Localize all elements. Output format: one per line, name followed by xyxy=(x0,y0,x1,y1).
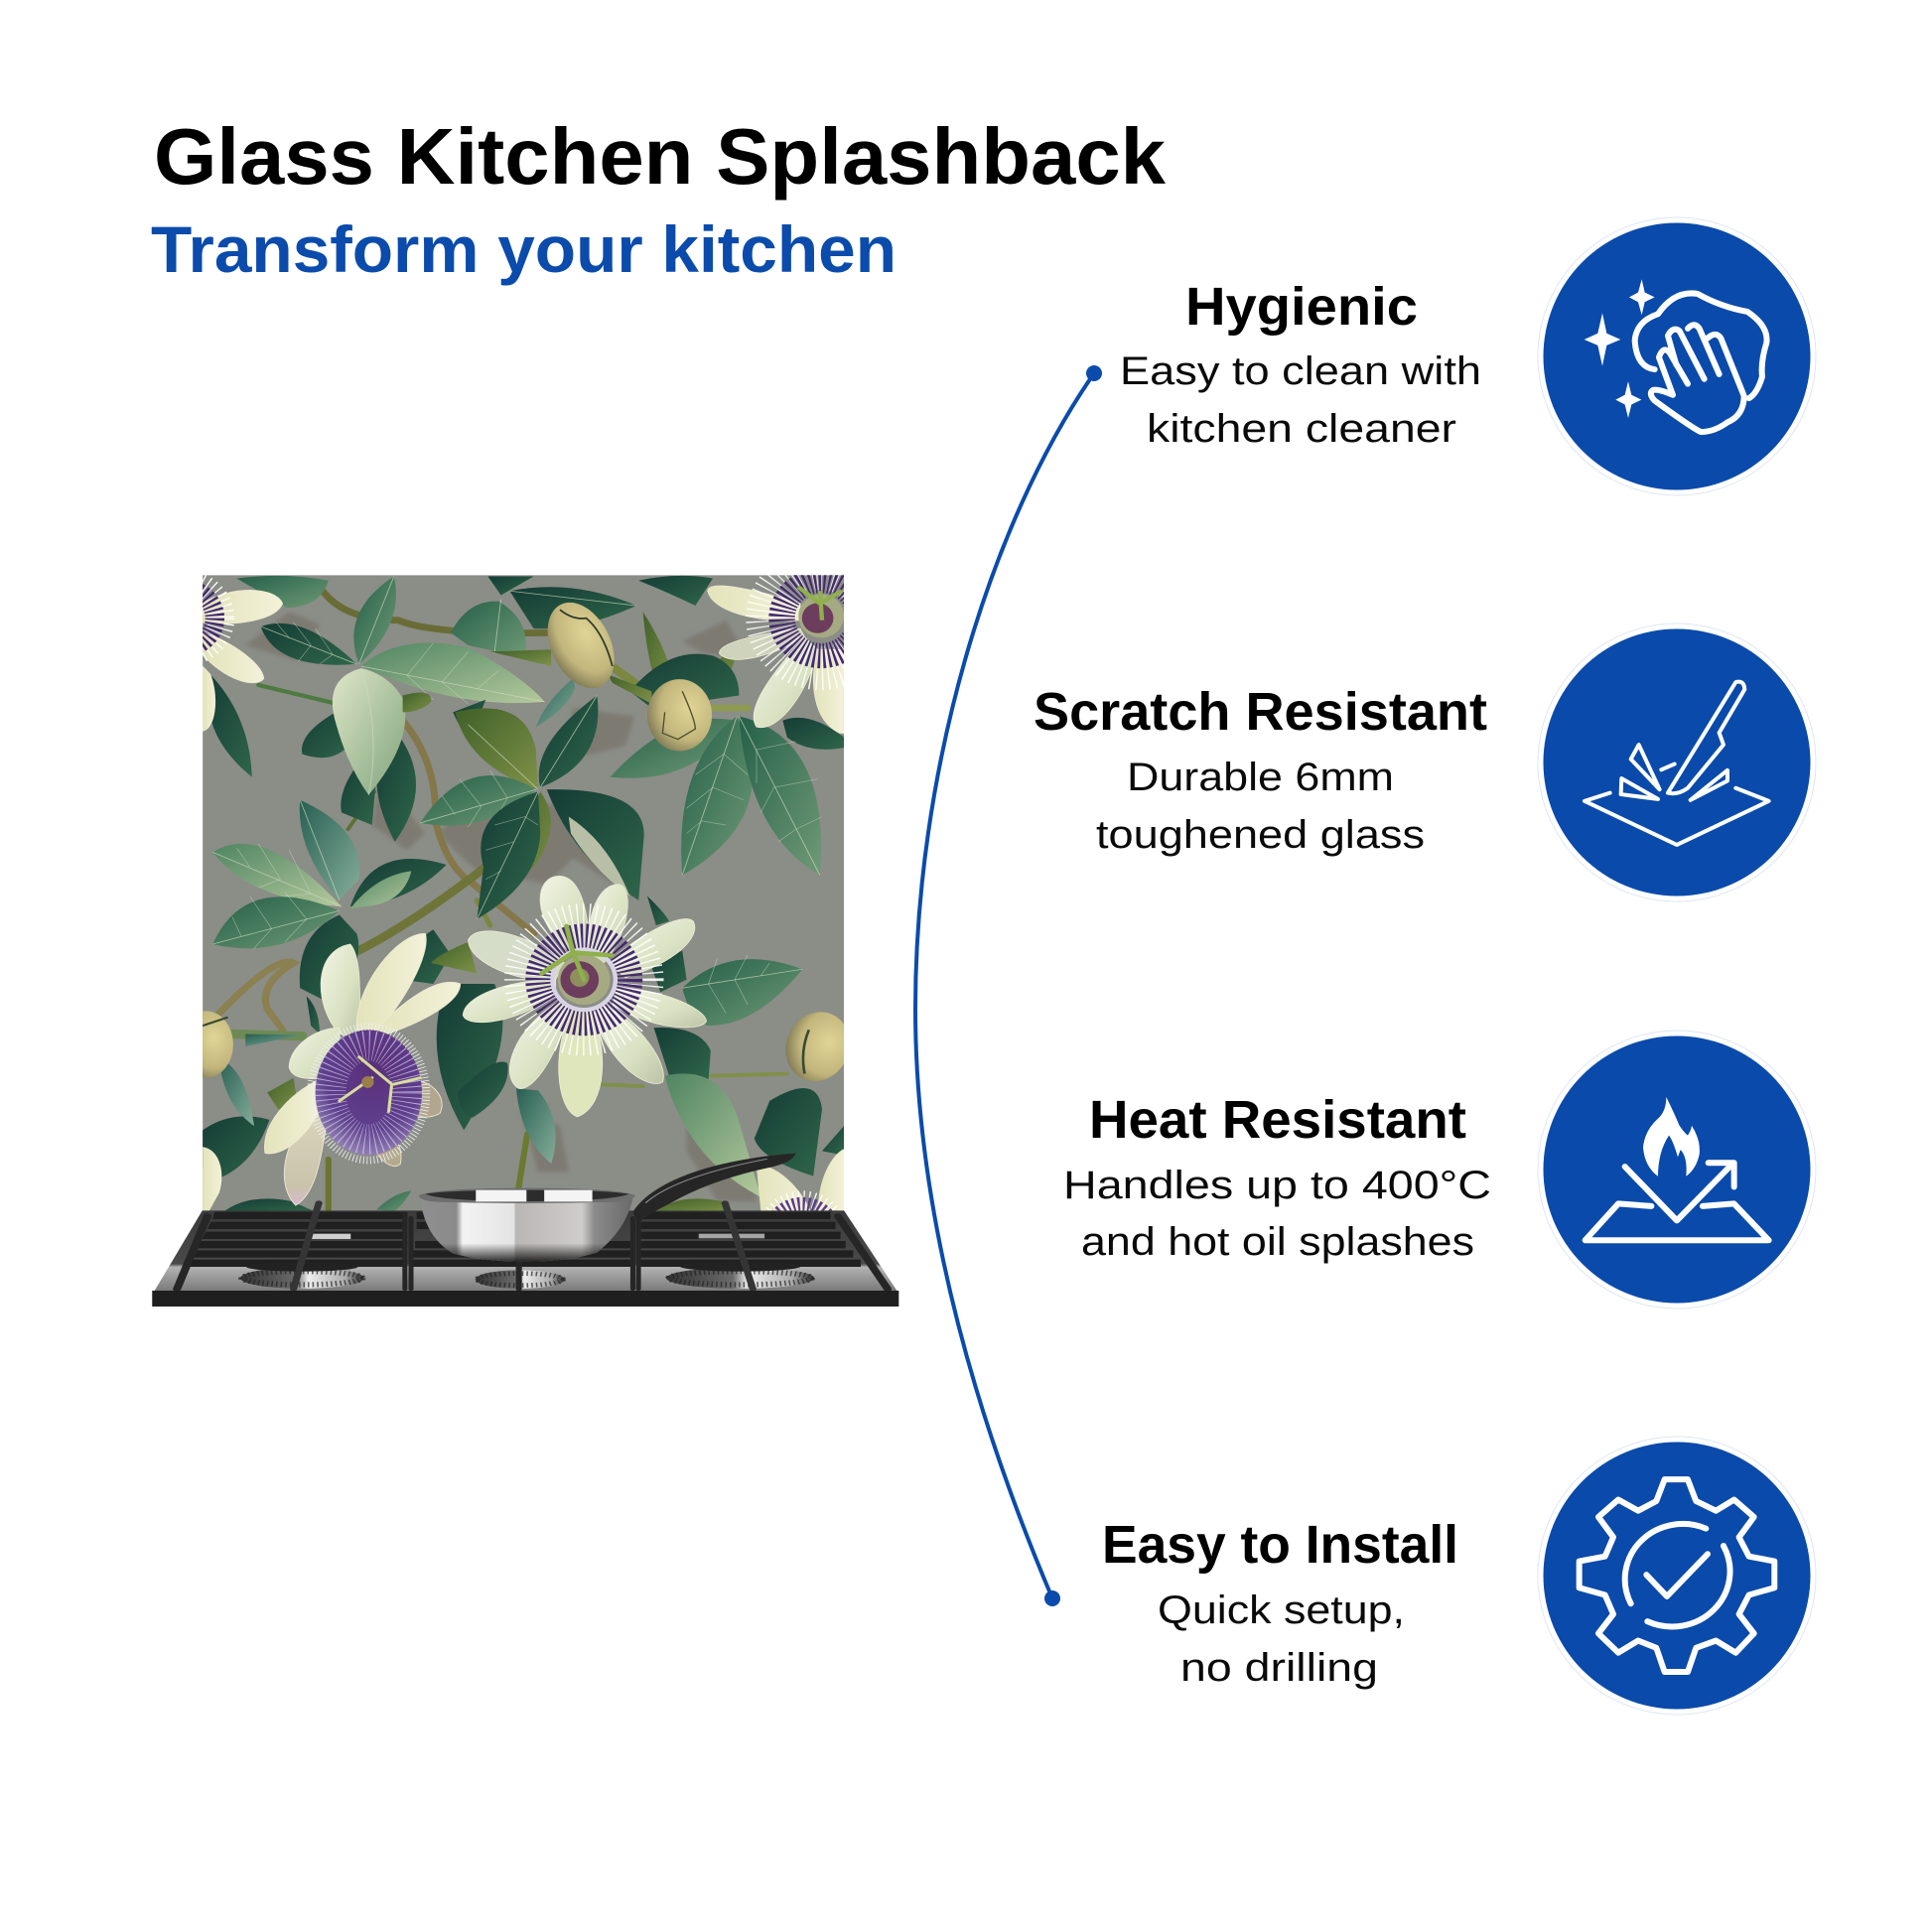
passion flower: top left xyxy=(203,575,283,732)
pan supports xyxy=(182,1212,861,1267)
burners xyxy=(240,1234,814,1289)
foliage xyxy=(203,576,844,1211)
passion flower: side view xyxy=(265,933,461,1205)
passion flower: top right xyxy=(707,575,844,734)
gas hob with pan xyxy=(152,1154,898,1307)
feature: heat resistant xyxy=(1063,1090,1491,1264)
description: Quick setup, xyxy=(1158,1588,1405,1632)
icon: knife on glass xyxy=(1538,623,1816,901)
icon: gear with check xyxy=(1538,1437,1816,1715)
vines xyxy=(219,587,787,1211)
feature: easy to install xyxy=(1102,1515,1458,1690)
passion flower: bottom right xyxy=(203,1147,844,1211)
description: no drilling xyxy=(1180,1646,1378,1690)
connector arc xyxy=(915,365,1102,1606)
pan xyxy=(419,1154,796,1262)
leaf shadows xyxy=(245,612,757,1201)
description: and hot oil splashes xyxy=(1081,1220,1474,1264)
grate frame xyxy=(177,1203,888,1289)
flower buds xyxy=(179,593,859,1089)
description xyxy=(1063,1164,1491,1264)
description: kitchen cleaner xyxy=(1147,407,1456,451)
heading: Easy to Install xyxy=(1102,1515,1458,1575)
passion flower: centre xyxy=(463,876,706,1117)
heading: Heat Resistant xyxy=(1089,1090,1466,1150)
title: Glass Kitchen Splashback xyxy=(154,112,1167,201)
splashback floral panel xyxy=(203,575,844,1211)
icon: cleaning hand xyxy=(1538,217,1816,495)
hob surface xyxy=(154,1210,897,1292)
description: Durable 6mm xyxy=(1127,756,1394,799)
description xyxy=(1158,1588,1405,1690)
description xyxy=(1096,756,1425,857)
icon: flame on glass xyxy=(1538,1031,1816,1309)
hob front edge xyxy=(152,1291,898,1307)
subtitle: Transform your kitchen xyxy=(151,212,897,286)
heading: Hygienic xyxy=(1185,277,1418,337)
description xyxy=(1120,349,1481,451)
description: Easy to clean with xyxy=(1120,349,1481,393)
heading: Scratch Resistant xyxy=(1034,682,1487,742)
description: toughened glass xyxy=(1096,813,1425,857)
description: Handles up to 400°C xyxy=(1063,1164,1491,1207)
feature: hygienic xyxy=(1120,277,1481,451)
feature: scratch resistant xyxy=(1034,682,1487,857)
